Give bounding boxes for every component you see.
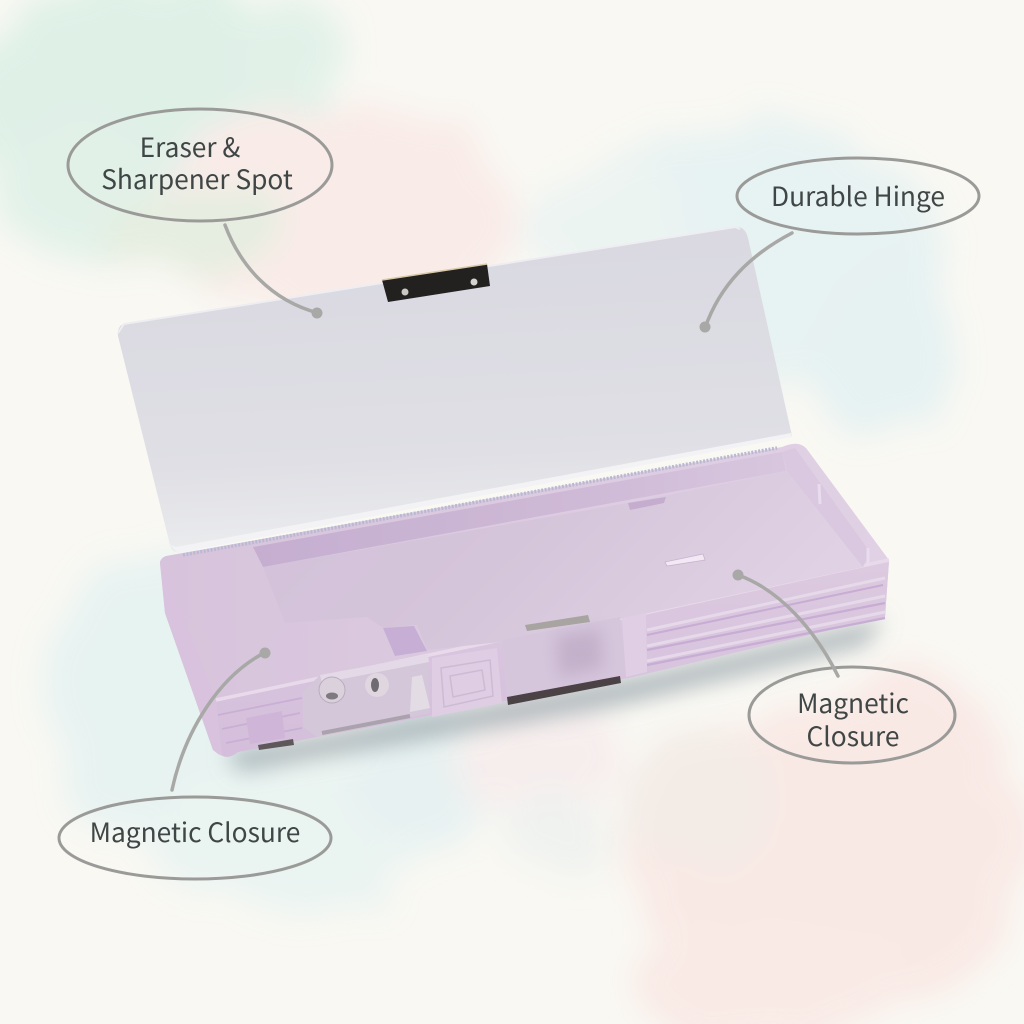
open lid xyxy=(118,227,792,553)
lid hinge fringe xyxy=(183,448,777,555)
callout: Magnetic Closure right xyxy=(749,667,955,763)
callout: Eraser & Sharpener Spot xyxy=(68,109,332,221)
rim highlight xyxy=(216,560,889,700)
left side face xyxy=(160,560,225,757)
sharpener compartment xyxy=(303,655,430,737)
callout: Durable Hinge xyxy=(737,158,979,234)
magnetic latch tab xyxy=(502,613,647,705)
arrow: to hinge xyxy=(700,233,792,332)
right wall xyxy=(782,448,870,567)
sharpener bay xyxy=(383,626,427,656)
side ribs xyxy=(218,578,885,743)
arrow: to eraser spot xyxy=(225,225,322,318)
corner clip xyxy=(246,711,294,750)
tray recess xyxy=(253,448,870,656)
callout: Eraser & Sharpener Spot: Eraser & xyxy=(140,126,240,165)
callout: Magnetic Closure left: Magnetic Closure xyxy=(90,811,300,850)
callout: Eraser & Sharpener Spot: Sharpener Spot xyxy=(101,158,293,197)
case base body xyxy=(160,444,889,757)
callout: Magnetic Closure right: Closure xyxy=(807,715,899,754)
drop shadow under the case xyxy=(225,618,885,772)
callout: Durable Hinge: Durable Hinge xyxy=(771,175,945,214)
arrow: to left closure xyxy=(172,648,270,790)
arrow: to right closure xyxy=(732,570,838,676)
callout: Magnetic Closure right: Magnetic xyxy=(797,682,909,721)
callout: Magnetic Closure left xyxy=(59,797,331,879)
pencil case xyxy=(118,227,889,757)
metal clasp plate xyxy=(382,264,490,302)
front face xyxy=(216,562,889,757)
square button xyxy=(432,648,502,717)
floor slot xyxy=(665,554,705,566)
